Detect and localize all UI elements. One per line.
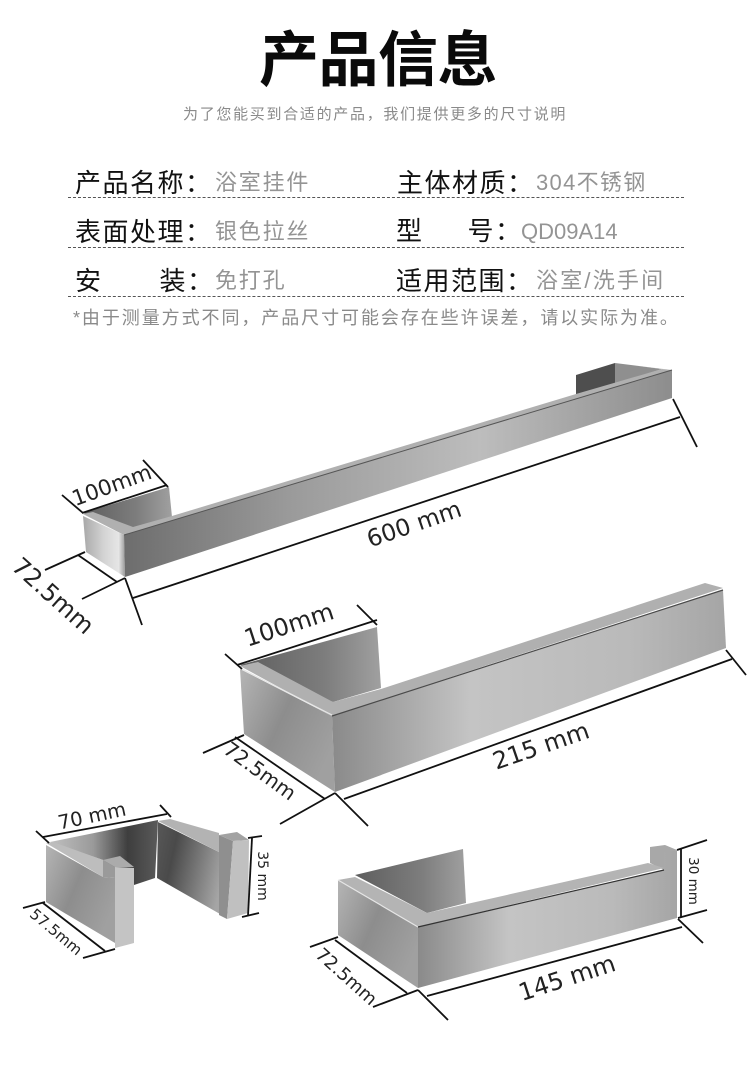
dimensions: double hook: 35 mm: [254, 851, 270, 901]
dimensions: towel bar: 100mm: [69, 460, 155, 512]
spec value: scope: 浴室/洗手间: [536, 268, 665, 293]
dimensions: toilet paper holder: [310, 840, 707, 1020]
dimensions: towel ring: 72.5mm: [219, 737, 301, 805]
dimensions: double hook: 70 mm: [56, 798, 128, 834]
spec label: product name: 产品名称：: [75, 168, 213, 198]
dimensions: double hook: 57.5mm: [26, 905, 86, 959]
product: toilet paper holder 145 mm: [338, 845, 677, 988]
dimensions: toilet paper holder: 145 mm: [515, 949, 619, 1007]
dimensions: towel bar: [6, 399, 697, 640]
spec value: installation: 免打孔: [215, 268, 286, 293]
product: towel bar 600 mm: [83, 363, 672, 577]
product: double hook: [46, 819, 249, 948]
dimensions: toilet paper holder: 72.5mm: [311, 944, 381, 1010]
disclaimer note: *由于测量方式不同，产品尺寸可能会存在些许误差，请以实际为准。: [73, 308, 680, 328]
spec label: material: 主体材质：: [397, 168, 535, 198]
title: 产品信息: [259, 27, 497, 94]
dimensions: towel ring: 100mm: [241, 597, 337, 653]
spec label: surface treatment: 表面处理：: [75, 217, 213, 247]
subtitle: 为了您能买到合适的产品，我们提供更多的尺寸说明: [183, 106, 567, 123]
spec value: model: QD09A14: [521, 219, 618, 244]
spec value: material: 304不锈钢: [536, 170, 647, 195]
spec label: model: 型 号：: [396, 216, 523, 246]
spec value: product name: 浴室挂件: [215, 170, 310, 195]
spec value: surface treatment: 银色拉丝: [215, 219, 310, 244]
product: towel ring 215 mm: [240, 583, 726, 792]
dimensions: towel bar: 72.5mm: [6, 552, 100, 640]
dimensions: toilet paper holder: 30 mm: [685, 857, 701, 905]
dimensions: double hook: [23, 798, 270, 959]
spec label: scope: 适用范围：: [396, 266, 534, 296]
dimensions: towel ring: 215 mm: [489, 716, 593, 776]
dimensions: towel bar: 600 mm: [363, 495, 465, 553]
spec label: installation: 安 装：: [75, 266, 215, 296]
dimensions: towel ring: [203, 597, 746, 826]
